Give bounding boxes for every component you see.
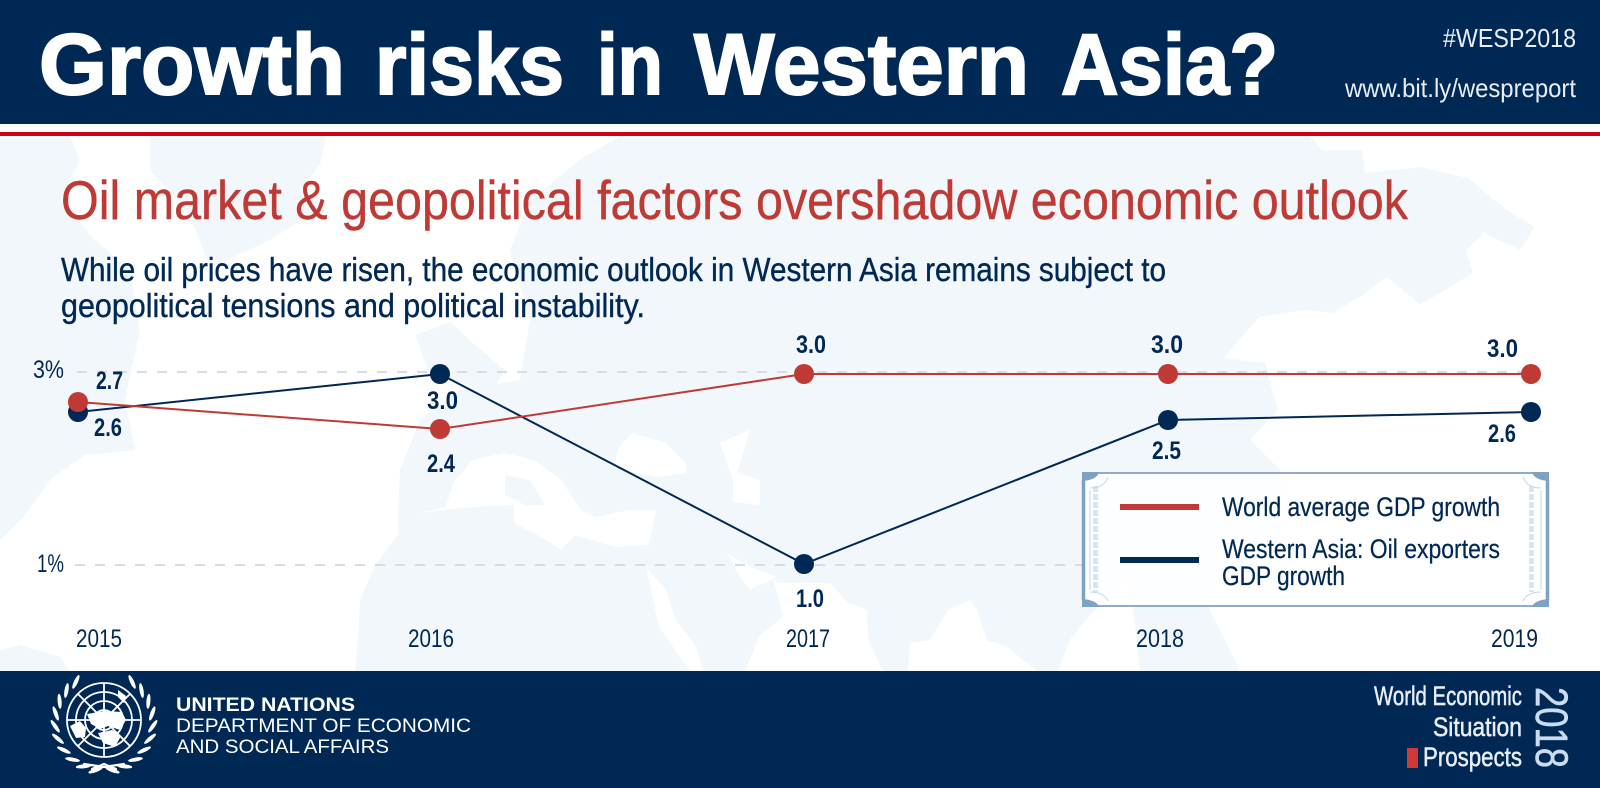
- series: Western Asia oil exporters: [68, 364, 1541, 574]
- footer band: [0, 671, 1600, 788]
- gridlines: [75, 372, 1531, 565]
- x axis years: 2017: [786, 625, 830, 653]
- report link: www.bit.ly/wespreport: [1344, 73, 1577, 103]
- title: [39, 17, 1278, 113]
- WESP wordmark: [1374, 681, 1522, 772]
- data labels: 3.0: [796, 331, 826, 359]
- WESP wordmark: Situation: [1433, 712, 1522, 742]
- series: world average: [68, 364, 1541, 439]
- legend key: world average: [1120, 492, 1500, 522]
- background world map: [0, 136, 1535, 671]
- x axis years: 2018: [1136, 625, 1184, 653]
- legend key: world average: World average GDP growth: [1222, 492, 1500, 522]
- legend: [1082, 472, 1549, 607]
- organisation name: UNITED NATIONS: [176, 694, 355, 716]
- organisation name: [176, 694, 471, 758]
- x axis years: 2015: [76, 625, 122, 653]
- data labels: 3.0: [1487, 335, 1518, 363]
- title: risks: [375, 17, 564, 113]
- body text: [61, 251, 1166, 324]
- title: in: [597, 17, 663, 113]
- title: Asia?: [1061, 17, 1278, 113]
- x axis years: 2019: [1491, 625, 1538, 653]
- subtitle: Oil market & geopolitical factors overshadow economic outlook: [61, 169, 1408, 231]
- data labels: 3.0: [427, 387, 458, 415]
- WESP wordmark: Prospects: [1423, 742, 1522, 772]
- data labels: 2.4: [427, 450, 455, 478]
- legend key: Western Asia: Western Asia: Oil exporters: [1222, 534, 1500, 564]
- data labels: 3.0: [1151, 331, 1183, 359]
- body text: While oil prices have risen, the economic outlook in Western Asia remains subject to: [61, 251, 1166, 288]
- header band: [0, 0, 1600, 124]
- legend key: Western Asia: [1120, 534, 1500, 591]
- organisation name: AND SOCIAL AFFAIRS: [176, 736, 389, 758]
- title: Western: [694, 17, 1029, 113]
- icon: red report book: [1407, 748, 1418, 768]
- x axis years: [76, 625, 1538, 653]
- map peninsula: [505, 475, 545, 505]
- red rule: [0, 132, 1600, 136]
- body text: geopolitical tensions and political instability.: [61, 287, 645, 324]
- data labels: 2.5: [1152, 437, 1181, 465]
- hashtag: #WESP2018: [1443, 23, 1576, 53]
- data labels: 1.0: [796, 585, 824, 613]
- legend key: Western Asia: GDP growth: [1222, 561, 1345, 591]
- legend frame: [1082, 472, 1549, 607]
- data labels: [94, 331, 1518, 613]
- y axis labels: [33, 356, 64, 578]
- data labels: 2.7: [96, 367, 123, 395]
- data labels: 2.6: [94, 414, 122, 442]
- title: Growth: [39, 17, 345, 113]
- WESP wordmark: World Economic: [1374, 681, 1522, 711]
- x axis years: 2016: [408, 625, 454, 653]
- icon: UN emblem: [49, 674, 159, 775]
- y axis labels: 3%: [33, 356, 64, 384]
- y axis labels: 1%: [37, 550, 64, 578]
- map seas: [419, 280, 1600, 671]
- data labels: 2.6: [1488, 420, 1516, 448]
- line chart: [33, 331, 1541, 653]
- WESP year: 2018: [1526, 687, 1577, 768]
- organisation name: DEPARTMENT OF ECONOMIC: [176, 715, 471, 737]
